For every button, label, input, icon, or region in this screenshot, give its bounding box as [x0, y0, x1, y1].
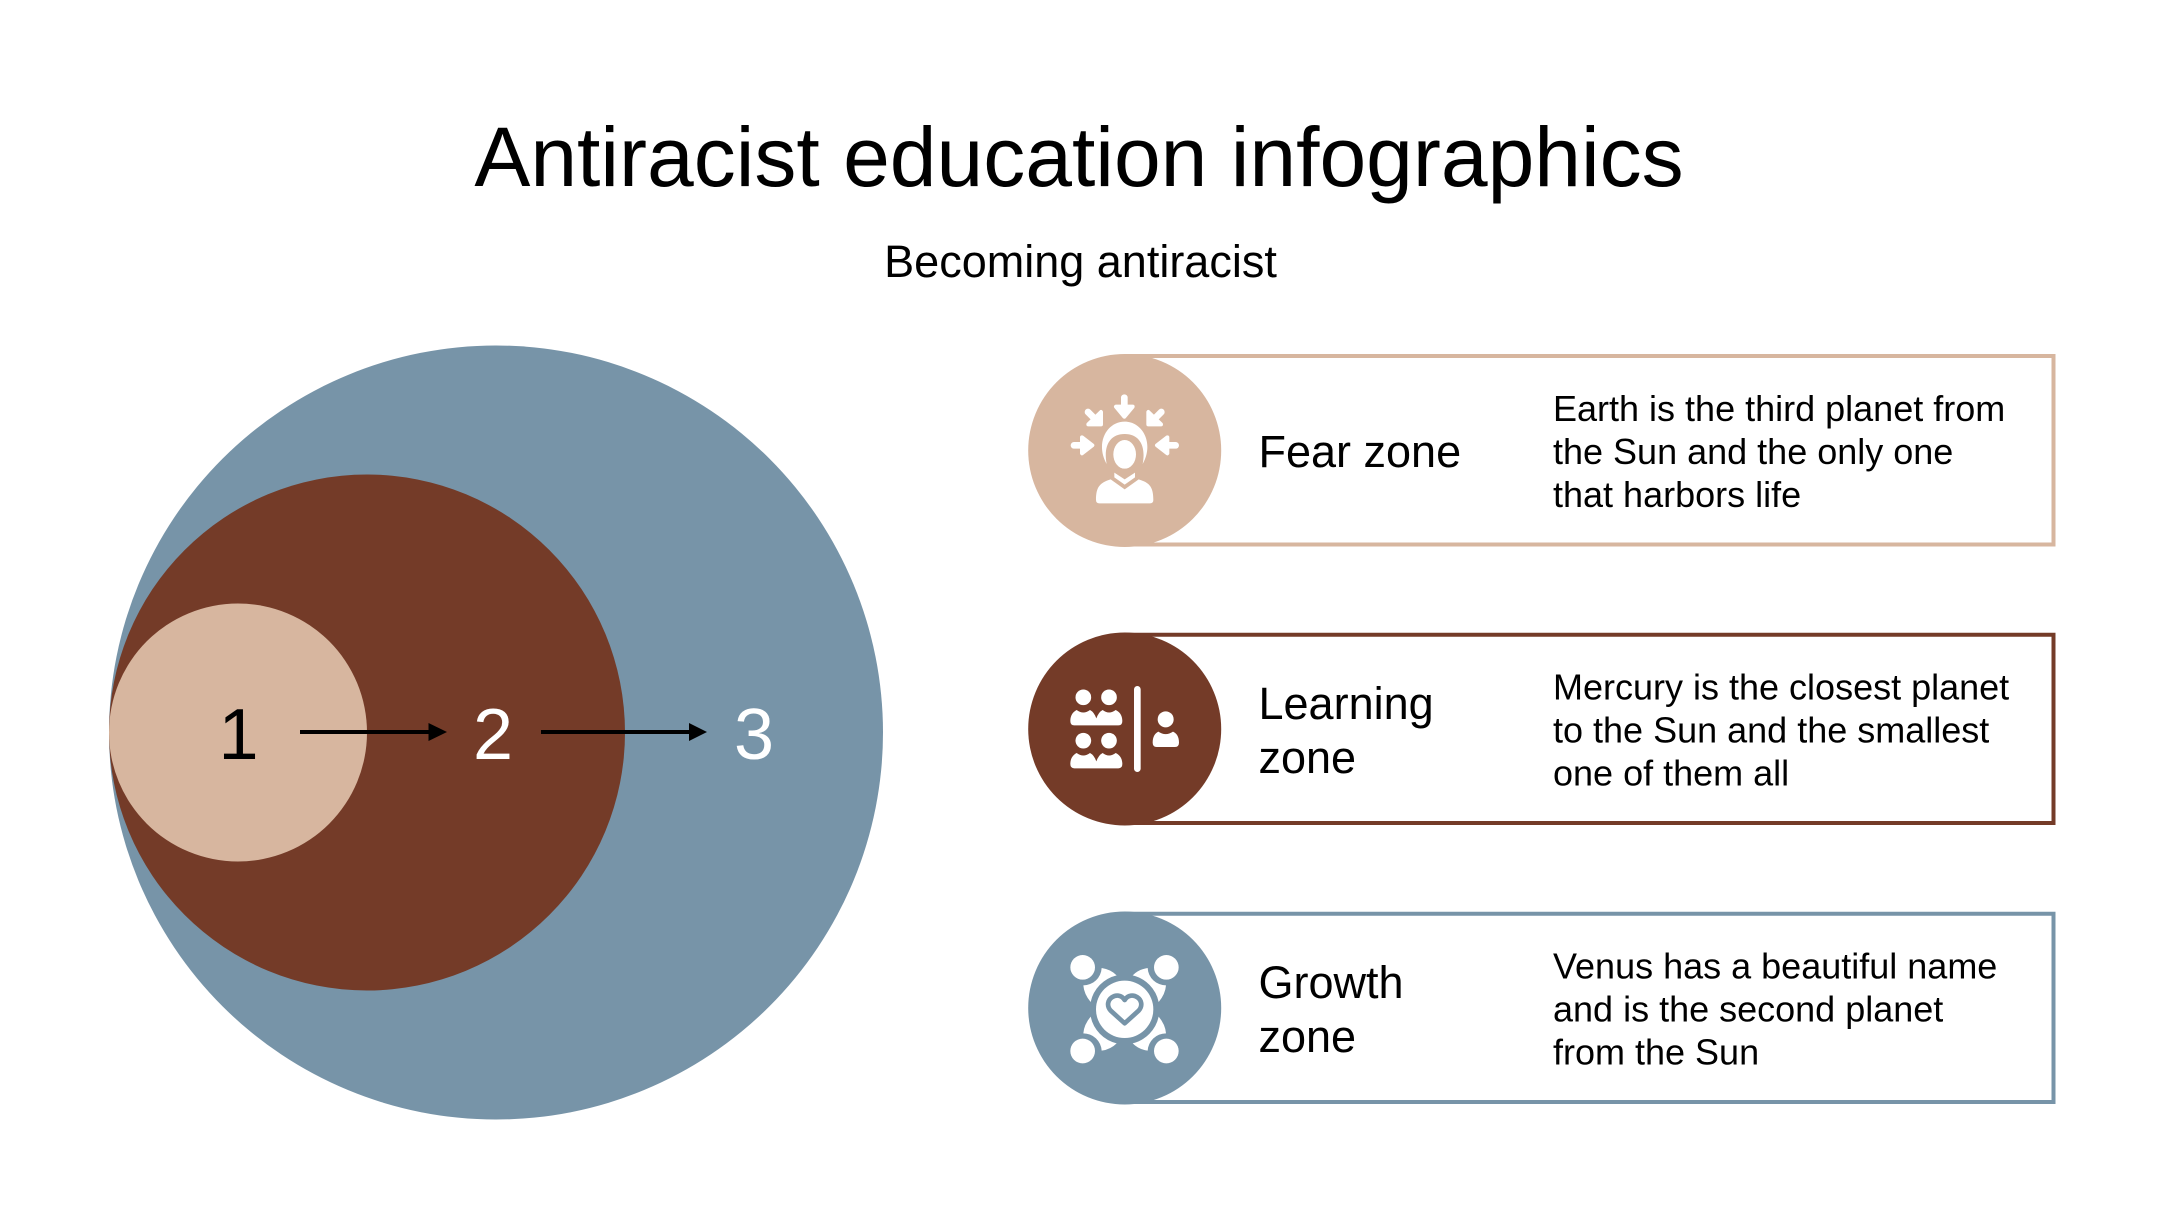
icon badge circle — [1028, 354, 1221, 547]
panel: learning zone — [1028, 632, 2054, 826]
description: Mercury is the closest planet — [1553, 666, 2009, 708]
panel: fear zone — [1028, 354, 2054, 547]
zone label: Growth — [1258, 957, 1404, 1008]
arrow: 1 to 2 — [300, 723, 447, 741]
icon badge circle — [1028, 912, 1221, 1104]
description: Earth is the third planet from — [1553, 388, 2005, 429]
panel: growth zone — [1028, 912, 2054, 1104]
card outline — [1125, 635, 2054, 823]
zone label: Learning — [1258, 678, 1434, 729]
zone label: Fear zone — [1258, 426, 1461, 477]
arrow: 2 to 3 — [541, 723, 707, 741]
circle: learning zone — [109, 474, 625, 990]
subtitle: Becoming antiracist — [884, 236, 1277, 287]
description: that harbors life — [1553, 474, 1801, 515]
description: Venus has a beautiful name — [1553, 946, 1997, 986]
icon: person surrounded by inward arrows — [1074, 398, 1176, 503]
description: and is the second planet — [1553, 988, 1943, 1030]
description: the Sun and the only one — [1553, 431, 1953, 472]
icon badge circle — [1028, 632, 1221, 826]
description: one of them all — [1553, 752, 1789, 794]
number 3: 3 — [734, 695, 774, 775]
title: Antiracist education infographics — [474, 110, 1684, 204]
zone label: zone — [1258, 732, 1356, 783]
zone label: zone — [1258, 1011, 1356, 1062]
icon: group facing one person — [1070, 686, 1179, 772]
concentric zones diagram — [109, 346, 883, 1120]
circle: fear zone — [109, 604, 367, 862]
circle: growth zone — [109, 346, 883, 1120]
card outline — [1125, 356, 2054, 544]
card outline — [1125, 914, 2054, 1102]
number 1: 1 — [218, 695, 259, 775]
description: from the Sun — [1553, 1032, 1759, 1072]
number 2: 2 — [473, 695, 513, 775]
icon: four people around a heart — [1070, 955, 1179, 1063]
description: to the Sun and the smallest — [1553, 710, 1989, 750]
